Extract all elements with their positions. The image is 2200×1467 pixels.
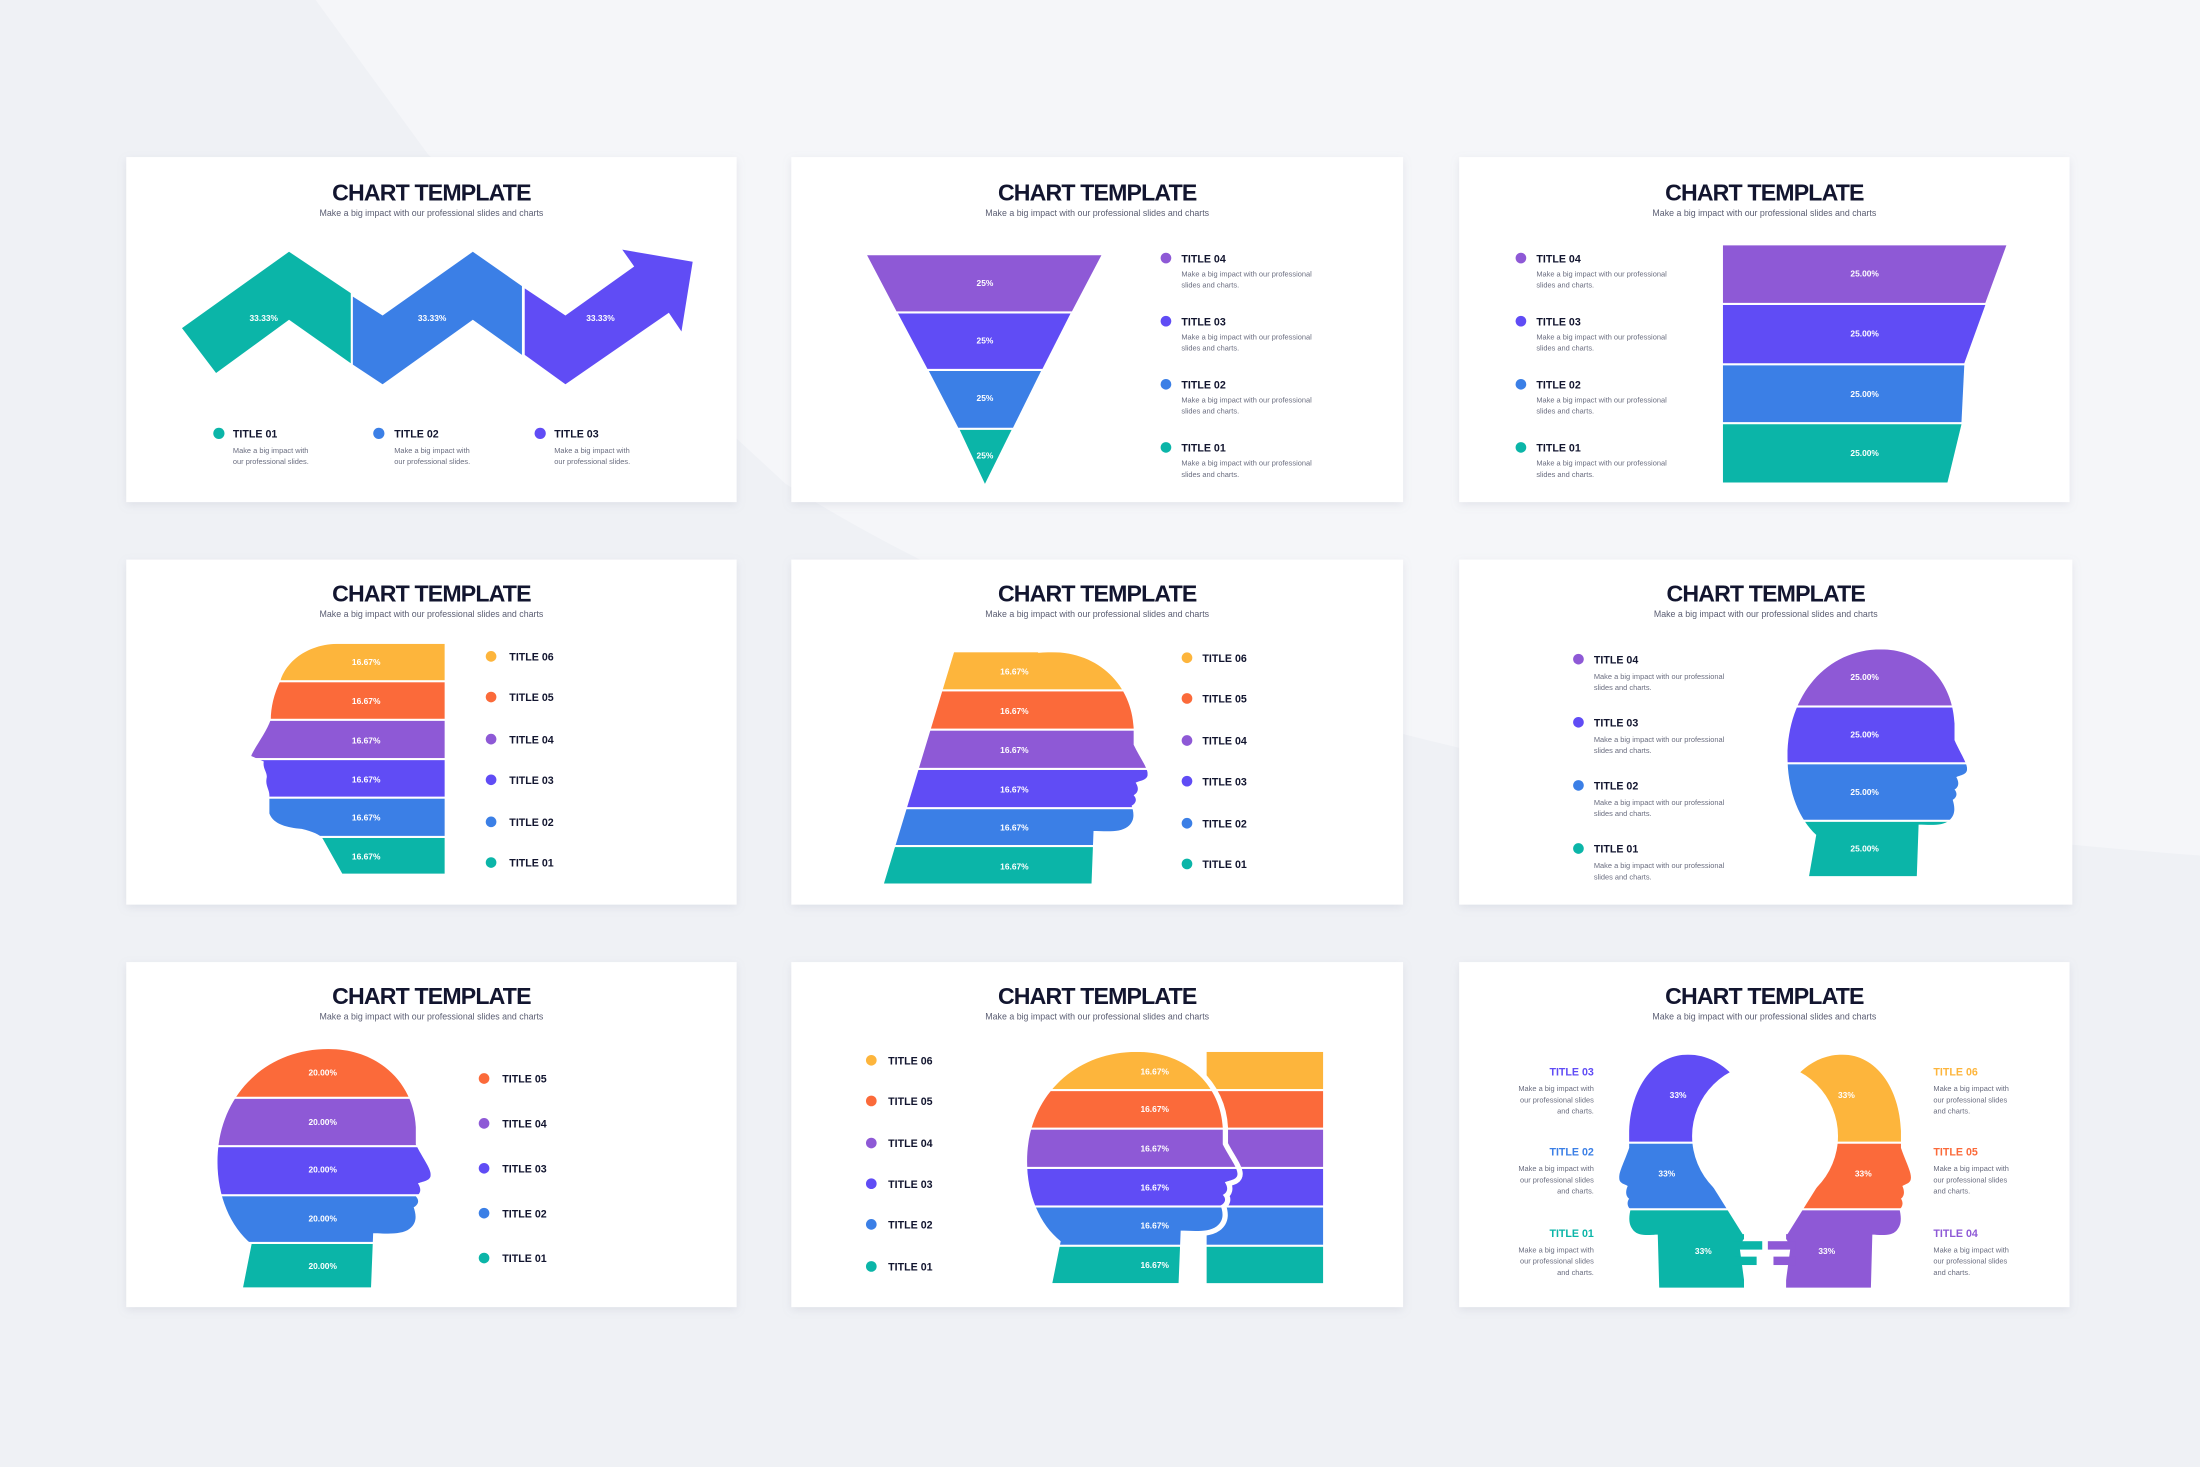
panel: two heads bulb	[1459, 962, 2070, 1307]
heading: Make a big impact with our professional slides and charts	[320, 609, 544, 619]
chart: heads with bulb: 33%	[1855, 1169, 1872, 1179]
chart: trapezoid: 25.00%	[1850, 448, 1879, 458]
chart: zigzag: 33.33%	[418, 313, 447, 323]
panel: trapezoid	[1459, 157, 2070, 502]
heading	[1652, 180, 1877, 218]
legend: TITLE 03	[1594, 717, 1638, 729]
chart: trapezoid: 25.00%	[1850, 268, 1879, 278]
legend: TITLE 05	[509, 692, 554, 704]
chart: head: 20.00%	[308, 1261, 337, 1271]
chart: head: 16.67%	[1000, 822, 1029, 832]
legend: Make a big impact with our professional	[1594, 798, 1725, 807]
legend: TITLE 02	[888, 1220, 933, 1232]
legend: slides and charts.	[1536, 470, 1594, 479]
chart: triangle: 25%	[977, 278, 994, 288]
legend: TITLE 03	[1202, 776, 1247, 788]
chart: zigzag: 33.33%	[586, 313, 615, 323]
legend: Make a big impact with our professional	[1181, 332, 1312, 341]
chart: head and columns	[1017, 1052, 1333, 1283]
panel: inverted triangle	[791, 157, 1403, 502]
legend: slides and charts.	[1181, 470, 1239, 479]
heading	[320, 983, 544, 1022]
heading: Make a big impact with our professional slides and charts	[320, 1012, 544, 1022]
chart: heads with bulb: 33%	[1670, 1090, 1687, 1100]
left descriptions: and charts.	[1557, 1187, 1594, 1196]
legend: our professional slides.	[233, 457, 309, 466]
chart: head: 20.00%	[308, 1164, 337, 1174]
legend: TITLE 04	[1594, 654, 1638, 666]
chart: triangle	[867, 255, 1101, 484]
chart: head: 16.67%	[1000, 784, 1029, 794]
legend: TITLE 01	[1594, 844, 1638, 856]
heading	[320, 180, 544, 218]
chart: heads with bulb: 33%	[1818, 1246, 1836, 1256]
legend: TITLE 01	[1181, 443, 1226, 455]
heading	[985, 581, 1210, 619]
legend: our professional slides.	[554, 457, 630, 466]
legend: TITLE 04	[888, 1138, 933, 1150]
chart: zigzag: 33.33%	[250, 313, 279, 323]
legend: TITLE 06	[888, 1055, 933, 1067]
chart: head and columns: 16.67%	[1140, 1143, 1170, 1153]
right descriptions: TITLE 06	[1933, 1067, 1978, 1079]
chart: head: 25.00%	[1850, 672, 1879, 682]
left descriptions: our professional slides	[1520, 1175, 1594, 1184]
right descriptions	[1933, 1067, 2009, 1277]
heading	[985, 180, 1210, 218]
chart: head: 16.67%	[352, 696, 381, 706]
chart: head: 20.00%	[308, 1068, 337, 1078]
legend: TITLE 06	[509, 652, 554, 664]
heading: CHART TEMPLATE	[998, 180, 1197, 206]
legend: TITLE 03	[1181, 316, 1226, 328]
legend: Make a big impact with our professional	[1181, 269, 1312, 278]
legend: Make a big impact with our professional	[1536, 459, 1667, 468]
chart: head: 16.67%	[352, 657, 381, 667]
legend: TITLE 04	[1202, 736, 1247, 748]
legend: TITLE 04	[509, 734, 554, 746]
legend: TITLE 02	[1181, 379, 1226, 391]
heading: CHART TEMPLATE	[1666, 581, 1865, 607]
legend: Make a big impact with	[394, 446, 470, 455]
left descriptions: and charts.	[1557, 1268, 1594, 1277]
left descriptions: our professional slides	[1520, 1095, 1594, 1104]
chart: head and columns: 16.67%	[1140, 1183, 1170, 1193]
right descriptions: our professional slides	[1933, 1095, 2008, 1104]
chart: head: 16.67%	[352, 852, 381, 862]
legend: TITLE 03	[502, 1163, 547, 1175]
right descriptions: our professional slides	[1933, 1175, 2008, 1184]
legend: TITLE 02	[394, 429, 439, 441]
left descriptions: Make a big impact with	[1518, 1084, 1594, 1093]
legend: TITLE 02	[509, 817, 554, 829]
legend: TITLE 02	[1594, 781, 1638, 793]
heading: CHART TEMPLATE	[998, 581, 1197, 607]
legend: TITLE 01	[888, 1262, 933, 1274]
chart: head: 25.00%	[1850, 730, 1879, 740]
heading: CHART TEMPLATE	[1665, 983, 1864, 1009]
chart: head: 25.00%	[1850, 787, 1879, 797]
panel: zigzag arrow	[126, 157, 737, 502]
chart: head and columns: 16.67%	[1140, 1221, 1170, 1231]
legend: slides and charts.	[1536, 344, 1594, 353]
panel: head left 6 bands	[126, 560, 737, 905]
chart: triangle: 25%	[977, 393, 994, 403]
legend: TITLE 05	[888, 1096, 933, 1108]
chart: triangle: 25%	[977, 336, 994, 346]
heading: CHART TEMPLATE	[332, 983, 531, 1009]
chart: head: 20.00%	[308, 1117, 337, 1127]
chart: trapezoid: 25.00%	[1850, 389, 1879, 399]
legend	[486, 651, 554, 870]
panel: head right 4 bands	[1459, 560, 2072, 905]
heading: CHART TEMPLATE	[1665, 180, 1864, 206]
legend: TITLE 05	[502, 1074, 547, 1086]
heading: Make a big impact with our professional slides and charts	[1652, 208, 1877, 218]
legend: TITLE 02	[502, 1208, 547, 1220]
chart: head: 16.67%	[1000, 862, 1029, 872]
heading: Make a big impact with our professional slides and charts	[1654, 609, 1878, 619]
legend: TITLE 03	[554, 429, 599, 441]
legend: slides and charts.	[1181, 407, 1239, 416]
chart: head: 16.67%	[352, 775, 381, 785]
chart: zigzag	[182, 250, 693, 384]
legend: TITLE 03	[509, 775, 554, 787]
panel: slanted head	[791, 560, 1403, 905]
legend: TITLE 02	[1536, 379, 1581, 391]
heading	[1652, 983, 1877, 1022]
legend: slides and charts.	[1181, 281, 1239, 290]
legend	[213, 428, 630, 466]
legend: Make a big impact with our professional	[1594, 735, 1725, 744]
legend	[1161, 253, 1312, 479]
right descriptions: Make a big impact with	[1933, 1084, 2009, 1093]
heading: CHART TEMPLATE	[332, 581, 531, 607]
legend: TITLE 06	[1202, 653, 1247, 665]
legend: slides and charts.	[1594, 746, 1652, 755]
right descriptions: our professional slides	[1933, 1257, 2008, 1266]
legend: slides and charts.	[1594, 809, 1652, 818]
heading	[320, 581, 544, 619]
left descriptions	[1518, 1067, 1594, 1277]
right descriptions: TITLE 05	[1933, 1147, 1978, 1159]
chart: head: 16.67%	[352, 735, 381, 745]
legend: Make a big impact with	[233, 446, 308, 455]
chart: head: 16.67%	[1000, 745, 1029, 755]
legend: TITLE 03	[1536, 316, 1581, 328]
legend: slides and charts.	[1181, 344, 1239, 353]
legend: Make a big impact with our professional	[1594, 861, 1725, 870]
heading: Make a big impact with our professional slides and charts	[985, 1012, 1210, 1022]
chart: heads with bulb: 33%	[1695, 1246, 1712, 1256]
heading: Make a big impact with our professional slides and charts	[320, 208, 544, 218]
left descriptions: our professional slides	[1520, 1257, 1594, 1266]
right descriptions: and charts.	[1933, 1107, 1970, 1116]
left descriptions: TITLE 03	[1549, 1067, 1594, 1079]
right descriptions: Make a big impact with	[1933, 1164, 2009, 1173]
chart: head and columns: 16.67%	[1140, 1066, 1170, 1076]
legend: Make a big impact with our professional	[1536, 396, 1667, 405]
chart: head	[884, 652, 1148, 884]
panel: head with columns	[791, 962, 1403, 1307]
chart: trapezoid: 25.00%	[1850, 329, 1879, 339]
chart: triangle: 25%	[977, 451, 994, 461]
legend: Make a big impact with our professional	[1536, 332, 1667, 341]
legend: Make a big impact with our professional	[1594, 672, 1725, 681]
legend: slides and charts.	[1536, 407, 1594, 416]
left descriptions: Make a big impact with	[1518, 1245, 1594, 1254]
chart: trapezoid	[1723, 245, 2006, 482]
panel: head 5 bands	[126, 962, 737, 1307]
right descriptions: and charts.	[1933, 1268, 1970, 1277]
legend: our professional slides.	[394, 457, 470, 466]
legend	[1516, 253, 1667, 479]
heading	[985, 983, 1210, 1022]
heading: Make a big impact with our professional slides and charts	[985, 208, 1210, 218]
heading: CHART TEMPLATE	[332, 180, 531, 206]
heading: Make a big impact with our professional slides and charts	[985, 609, 1210, 619]
left descriptions: Make a big impact with	[1518, 1164, 1594, 1173]
chart: head: 25.00%	[1850, 843, 1879, 853]
chart: head: 20.00%	[308, 1214, 337, 1224]
chart: head: 16.67%	[1000, 667, 1029, 677]
legend: TITLE 05	[1202, 694, 1247, 706]
legend: TITLE 01	[233, 429, 277, 441]
chart: heads with bulb: 33%	[1658, 1169, 1676, 1179]
left descriptions: TITLE 02	[1549, 1147, 1594, 1159]
legend	[1182, 652, 1247, 871]
chart: head	[1782, 649, 1978, 878]
heading	[1654, 581, 1878, 619]
chart: heads with bulb	[1619, 1054, 1911, 1288]
legend: TITLE 03	[888, 1179, 933, 1191]
chart: head	[218, 1049, 431, 1288]
right descriptions: and charts.	[1933, 1187, 1970, 1196]
legend: TITLE 01	[1202, 859, 1247, 871]
legend: Make a big impact with our professional	[1181, 396, 1312, 405]
chart: heads with bulb: 33%	[1838, 1090, 1855, 1100]
chart: head and columns: 16.67%	[1140, 1104, 1170, 1114]
chart: head: 16.67%	[1000, 706, 1029, 716]
legend: TITLE 01	[502, 1253, 547, 1265]
legend: Make a big impact with our professional	[1536, 269, 1667, 278]
chart: head: 16.67%	[352, 812, 381, 822]
legend	[1573, 654, 1725, 881]
right descriptions: Make a big impact with	[1933, 1245, 2009, 1254]
left descriptions: and charts.	[1557, 1107, 1594, 1116]
legend: slides and charts.	[1536, 281, 1594, 290]
legend: TITLE 02	[1202, 818, 1247, 830]
legend: TITLE 01	[1536, 443, 1581, 455]
heading: CHART TEMPLATE	[998, 983, 1197, 1009]
legend: Make a big impact with	[554, 446, 630, 455]
legend: TITLE 04	[1536, 253, 1581, 265]
legend: slides and charts.	[1594, 683, 1652, 692]
legend: TITLE 04	[1181, 253, 1226, 265]
chart: head and columns: 16.67%	[1140, 1260, 1170, 1270]
legend: slides and charts.	[1594, 872, 1652, 881]
legend	[479, 1073, 547, 1265]
legend: TITLE 04	[502, 1119, 547, 1131]
right descriptions: TITLE 04	[1933, 1228, 1978, 1240]
heading: Make a big impact with our professional slides and charts	[1652, 1012, 1877, 1022]
legend: Make a big impact with our professional	[1181, 459, 1312, 468]
legend: TITLE 01	[509, 858, 554, 870]
legend	[866, 1055, 933, 1274]
left descriptions: TITLE 01	[1549, 1228, 1594, 1240]
chart: head	[239, 644, 449, 874]
